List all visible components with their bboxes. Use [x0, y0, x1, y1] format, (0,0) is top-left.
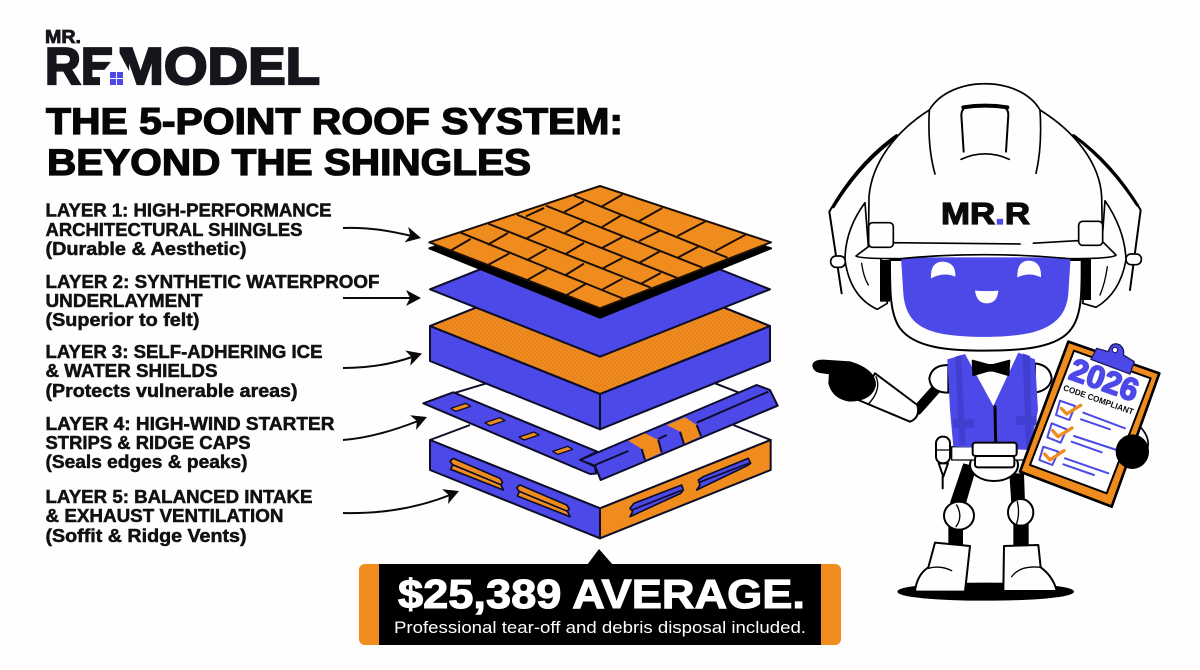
title — [46, 101, 623, 183]
label: layer 2 — [46, 272, 380, 330]
vest — [947, 353, 1038, 450]
logo: Mr. Remodel: MODEL — [117, 38, 320, 96]
head shell — [890, 260, 1082, 351]
knees — [944, 499, 1033, 530]
legs — [948, 463, 1029, 547]
layer 5: ventilation deck — [430, 425, 771, 538]
layer 1: architectural shingles — [429, 186, 771, 318]
label: layer 4: STRIPS & RIDGE CAPS — [46, 433, 250, 453]
bowtie — [973, 361, 1009, 375]
right hand — [1116, 434, 1149, 469]
clipboard year: 2026 — [1065, 351, 1144, 409]
label: layer 1 — [46, 200, 332, 259]
mascot body — [813, 353, 1148, 600]
left arm — [813, 361, 937, 422]
label: layer 1: ARCHITECTURAL SHINGLES — [46, 220, 302, 240]
exploded roof diagram — [423, 186, 778, 538]
earmuff band — [829, 135, 1141, 293]
boots — [915, 543, 1057, 592]
price banner — [359, 549, 841, 645]
clipboard clip — [1091, 344, 1134, 374]
arrow: layer 1 — [343, 227, 423, 246]
price banner: $25,389 AVERAGE. — [398, 571, 805, 617]
clipboard — [1020, 342, 1159, 507]
label: layer 1: (Durable & Aesthetic) — [46, 239, 246, 259]
arrow: layer 3 — [343, 346, 424, 368]
label: layer 4 — [46, 414, 334, 472]
label: layer 4: LAYER 4: HIGH-WIND STARTER — [46, 414, 334, 434]
tool belt pouches — [973, 443, 1017, 467]
shoulders — [929, 365, 948, 393]
arrow: layer 5 — [343, 484, 462, 513]
layer 2: synthetic underlayment — [430, 222, 770, 357]
arrow: layer 4 — [343, 410, 430, 440]
logo: Mr. Remodel: MR. — [45, 27, 81, 47]
blue face — [901, 257, 1071, 337]
label: layer 5: & EXHAUST VENTILATION — [46, 506, 284, 526]
title: THE 5-POINT ROOF SYSTEM: — [46, 101, 623, 142]
mascot: robot Mr. R — [813, 84, 1159, 600]
label: layer 4: (Seals edges & peaks) — [46, 452, 248, 472]
ground shadow — [898, 584, 1073, 600]
label: layer 3 — [46, 342, 322, 401]
label: layer 3: LAYER 3: SELF-ADHERING ICE — [46, 342, 322, 362]
head with helmet — [829, 84, 1141, 351]
layer 4: starter strips and ridge caps — [423, 383, 778, 480]
label: layer 2: LAYER 2: SYNTHETIC WATERPROOF — [46, 272, 380, 292]
drill tool — [936, 437, 950, 488]
clipboard caption: CODE COMPLIANT — [1062, 382, 1135, 417]
title: BEYOND THE SHINGLES — [47, 142, 531, 183]
helmet dome — [868, 84, 1103, 250]
layer 3: ice and water shield — [430, 258, 770, 429]
label: layer 2: UNDERLAYMENT — [46, 291, 203, 311]
checklist — [1039, 401, 1125, 475]
label: layer 5 — [46, 487, 312, 546]
label: layer 5: LAYER 5: BALANCED INTAKE — [46, 487, 312, 507]
right arm — [1140, 427, 1148, 452]
pelvis and belt — [970, 449, 1018, 481]
label: layer 3: & WATER SHIELDS — [46, 361, 218, 381]
label: layer 5: (Soffit & Ridge Vents) — [46, 526, 247, 546]
helmet brim — [856, 241, 1116, 259]
price banner: Professional tear-off and debris disposal included. — [394, 618, 806, 637]
label: layer 2: (Superior to felt) — [46, 310, 200, 330]
label: layer 1: LAYER 1: HIGH-PERFORMANCE — [46, 200, 332, 220]
earmuffs — [831, 201, 1141, 309]
helmet ridges and vent — [929, 106, 1041, 174]
label: layer 3: (Protects vulnerable areas) — [46, 381, 298, 401]
helmet clips — [869, 221, 1103, 247]
eyes and mouth — [931, 261, 1041, 303]
arrow: layer 2 — [343, 290, 421, 306]
logo: Mr. Remodel — [45, 27, 320, 96]
logo: Mr. Remodel: RE — [45, 38, 114, 96]
helmet text: MR.R: MR.R — [941, 196, 1030, 231]
